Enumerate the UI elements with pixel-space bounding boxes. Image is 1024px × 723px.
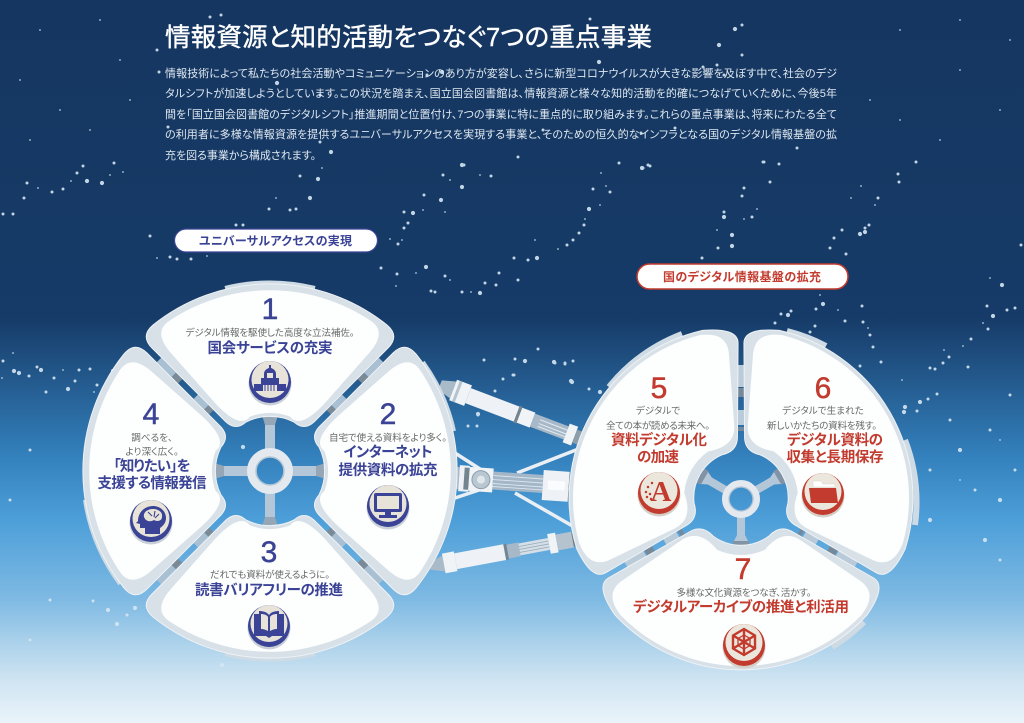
gap strips left wheel — [157, 358, 383, 584]
panel: sector 5 — [523, 293, 783, 602]
panel: sector 3: だれでも資料が使えるように。 — [210, 569, 330, 581]
panel: sector 6: 6 — [815, 372, 831, 405]
panel: sector 3: 3 — [261, 536, 277, 569]
panel: sector 2: インターネット — [343, 444, 432, 461]
panel: sector 2 — [314, 347, 457, 595]
panel: sector 7: 多様な文化資源をつなぎ、活かす。 — [676, 587, 812, 599]
right wheel hub — [696, 469, 786, 546]
icon: letter A: A — [651, 476, 672, 508]
panel: sector 7 — [603, 529, 879, 670]
panel: sector 2: 自宅で使える資料をより多く。 — [329, 432, 447, 444]
panel: sector 4: 4 — [143, 398, 159, 431]
intro paragraph: タルシフトが加速しようとしています。この状況を踏まえ、国立国会図書館は、情報資源と様々な知的活動を的確につなげていくために、今後5年 — [165, 86, 837, 100]
label: universal access — [174, 229, 378, 252]
label: universal access: ユニバーサルアクセスの実現 — [199, 233, 352, 248]
panel: sector 5: 資料デジタル化 — [611, 431, 708, 449]
intro paragraph: 情報技術によって私たちの社会活動やコミュニケーションのあり方が変容し、さらに新型コロナウイルスが大きな影響を及ぼす中で、社会のデジ — [165, 66, 837, 80]
panel: sector 5: 全ての本が読める未来へ。 — [606, 420, 710, 432]
panel: sector 4 — [83, 347, 226, 595]
icon: parliament building — [248, 361, 292, 406]
panel: sector 3: 読書バリアフリーの推進 — [195, 581, 344, 599]
intro paragraph: 間を「国立国会図書館のデジタルシフト」推進期間と位置付け、7つの事業に特に重点的に取り組みます。これらの重点事業は、将来にわたる全て — [165, 107, 837, 121]
panel: sector 3 — [146, 516, 394, 659]
label: national digital infrastructure: 国のデジタル情報基盤の拡充 — [663, 269, 821, 284]
panel: sector 6: デジタルで生まれた — [782, 405, 864, 417]
title: 情報資源と知的活動をつなぐ7つの重点事業 — [165, 24, 652, 52]
panel: sector 1: デジタル情報を駆使した高度な立法補佐。 — [185, 327, 354, 339]
panel: sector 6 — [699, 293, 959, 602]
panel: sector 6: 収集と長期保存 — [786, 448, 884, 466]
panel: sector 7: デジタルアーカイブの推進と利活用 — [633, 598, 849, 616]
panel: sector 5: の加速 — [637, 449, 680, 466]
icon: brain in head — [130, 500, 172, 544]
panel: sector 4: 調べるを、 — [131, 433, 173, 444]
panel: sector 2: 2 — [380, 398, 396, 431]
panel: sector 6: デジタル資料の — [787, 431, 883, 449]
gap strips right wheel — [624, 365, 858, 568]
icon: letter A — [638, 472, 680, 516]
panel: sector 1: 国会サービスの充実 — [208, 339, 332, 357]
panel: sector 1: 1 — [262, 293, 278, 326]
icon: open book — [248, 605, 290, 650]
panel: sector 1 — [146, 283, 394, 426]
icon: monitor — [366, 485, 410, 530]
connector trusses between wheels — [428, 375, 587, 576]
panel: sector 7: 7 — [735, 553, 751, 586]
panel: sector 4: より深く広く。 — [125, 447, 179, 458]
intro paragraph: 充を図る事業から構成されます。 — [165, 149, 316, 162]
left wheel hub — [214, 415, 326, 527]
panel: sector 4: 支援する情報発信 — [98, 474, 207, 492]
intro paragraph — [165, 66, 837, 162]
intro paragraph: の利用者に多様な情報資源を提供するユニバーサルアクセスを実現する事業と、そのための恒久的なインフラとなる国のデジタル情報基盤の拡 — [165, 127, 837, 141]
icon: folder — [802, 473, 844, 518]
icon: network pattern — [722, 624, 766, 668]
panel: sector 5: デジタルで — [635, 405, 680, 417]
panel: sector 5: 5 — [651, 372, 667, 405]
panel: sector 4: 「知りたい」を — [114, 458, 190, 475]
label: national digital infrastructure — [637, 264, 848, 289]
panel: sector 6: 新しいかたちの資料を残す。 — [767, 420, 877, 432]
panel: sector 2: 提供資料の拡充 — [338, 461, 438, 479]
